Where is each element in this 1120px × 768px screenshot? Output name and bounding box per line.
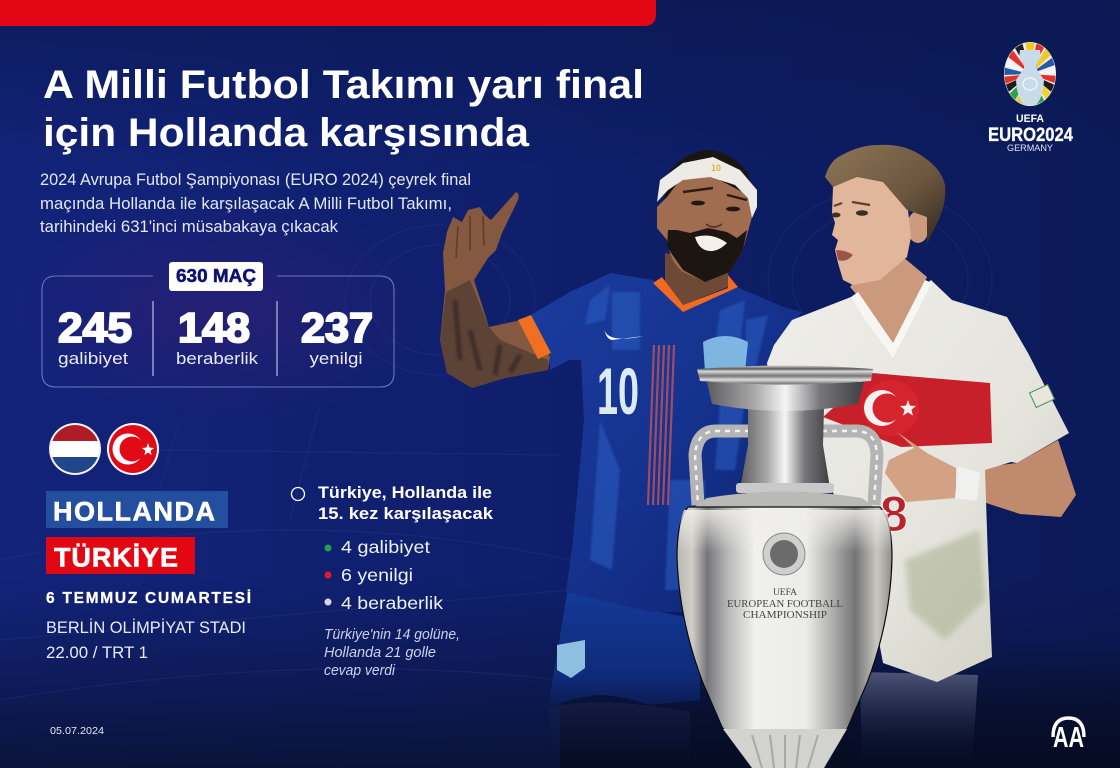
logo: AA <box>1053 718 1084 754</box>
thigh <box>548 702 690 768</box>
note: goals: cevap verdi <box>324 663 396 679</box>
trophy: Henri Delaunay Cup <box>677 366 892 768</box>
body <box>677 507 892 768</box>
headband <box>657 157 757 218</box>
stat: 237 yenilgi: yenilgi <box>310 349 362 368</box>
player: Netherlands forward <box>440 150 802 768</box>
list: losses: 6 yenilgi <box>341 565 413 585</box>
shorts <box>548 588 700 708</box>
title: A Milli Futbol Takımı yarı final <box>43 63 644 107</box>
hand shading <box>456 216 484 258</box>
intro text <box>40 171 471 236</box>
top red bar <box>0 0 656 26</box>
rim <box>697 366 873 384</box>
player: Netherlands forward: 10 <box>711 163 721 173</box>
right forearm <box>975 440 1076 517</box>
sleeve patch <box>1030 385 1054 407</box>
number 10: 10 <box>597 354 639 428</box>
wristband <box>955 466 980 501</box>
match date: 6 TEMMUZ CUMARTESİ <box>46 590 251 607</box>
number 8: 8 <box>880 486 908 542</box>
icon: Turkey flag <box>107 423 159 475</box>
eyes and brows <box>834 202 870 206</box>
logo wordmark: UEFA <box>1016 113 1044 125</box>
flutes <box>752 735 818 768</box>
sleeve cuff <box>518 315 551 359</box>
head to head text block <box>292 483 494 679</box>
heading: head to head <box>318 483 494 523</box>
shorts <box>860 672 978 768</box>
handles <box>695 431 877 505</box>
jersey <box>531 273 802 612</box>
logo: UEFA Euro 2024 <box>988 42 1074 151</box>
shirt <box>767 280 1069 682</box>
stat: 148 beraberlik <box>176 304 259 368</box>
list: wins: 4 galibiyet <box>341 537 430 557</box>
shorts crest <box>557 640 585 678</box>
heading: head to head: 15. kez karşılaşacak <box>318 504 494 523</box>
logo wordmark <box>988 113 1073 154</box>
neck <box>665 253 728 305</box>
ear <box>907 211 929 243</box>
heading: head to head: Türkiye, Hollanda ile <box>318 483 492 502</box>
badge: 630 maç: 630 MAÇ <box>176 266 256 286</box>
Turkey crest <box>863 380 919 436</box>
emblem <box>763 533 805 575</box>
collar <box>653 275 738 312</box>
base band <box>723 729 847 768</box>
arm and hand <box>440 192 550 388</box>
stat: 245 galibiyet: 245 <box>58 304 132 351</box>
mouth <box>695 235 727 251</box>
stat: 245 galibiyet <box>58 304 132 368</box>
date stamp: 05.07.2024 <box>50 725 104 737</box>
badge: 630 maç <box>169 262 263 291</box>
hand <box>885 432 956 502</box>
logo wordmark: EURO2024 <box>988 125 1073 146</box>
crest <box>703 336 748 372</box>
beard <box>667 228 747 282</box>
stat: 148 beraberlik: beraberlik <box>176 349 259 368</box>
match venue and time: BERLİN OLİMPİYAT STADI <box>46 618 246 637</box>
cup bowl <box>707 382 864 411</box>
engraved inscription: CHAMPIONSHIP <box>743 610 827 621</box>
face <box>832 172 911 285</box>
hair <box>825 145 945 244</box>
label: Türkiye <box>46 537 195 574</box>
engraved inscription: EUROPEAN FOOTBALL <box>727 599 843 610</box>
match venue and time: 22.00 / TRT 1 <box>46 644 148 662</box>
note: goals: Türkiye'nin 14 golüne, <box>324 627 460 643</box>
match venue and time <box>46 618 246 662</box>
label: Hollanda: HOLLANDA <box>53 496 215 526</box>
icon: Netherlands flag <box>49 423 101 475</box>
red chest band <box>823 373 992 447</box>
label: Türkiye: TÜRKİYE <box>54 542 178 572</box>
intro text: tarihindeki 631'inci müsabakaya çıkacak <box>40 218 339 236</box>
note: goals: Hollanda 21 golle <box>324 645 436 661</box>
mouth <box>836 250 853 261</box>
jersey patterns <box>585 285 768 590</box>
note: goals <box>324 627 460 679</box>
intro text: maçında Hollanda ile karşılaşacak A Milli Futbol Takımı, <box>40 195 452 213</box>
list: draws: 4 beraberlik <box>341 593 443 613</box>
title <box>43 63 644 155</box>
icon: ring bullet <box>292 488 304 500</box>
swoosh <box>604 328 644 340</box>
title: için Hollanda karşısında <box>43 111 530 155</box>
logo wordmark: GERMANY <box>1007 143 1054 154</box>
hair <box>664 150 752 200</box>
shoulder <box>684 492 884 514</box>
collar <box>851 280 932 358</box>
logo: AA: AA <box>1053 722 1084 754</box>
neck <box>740 408 830 488</box>
neck <box>850 257 927 347</box>
stat: 245 galibiyet: galibiyet <box>58 349 128 368</box>
body top highlight <box>679 510 891 552</box>
eyes and nose <box>683 188 747 200</box>
tattoos <box>440 280 548 388</box>
shirt shadows <box>905 530 985 640</box>
stat: 148 beraberlik: 148 <box>178 304 250 351</box>
intro text: 2024 Avrupa Futbol Şampiyonası (EURO 2024) çeyrek final <box>40 171 471 189</box>
engraved inscription: UEFA <box>773 588 797 598</box>
lower flange <box>736 483 834 493</box>
player: Turkey midfielder <box>767 145 1076 768</box>
stat: 237 yenilgi: 237 <box>301 304 373 351</box>
panel: match record <box>42 262 394 387</box>
face <box>657 175 752 282</box>
engraved inscription <box>727 588 843 621</box>
